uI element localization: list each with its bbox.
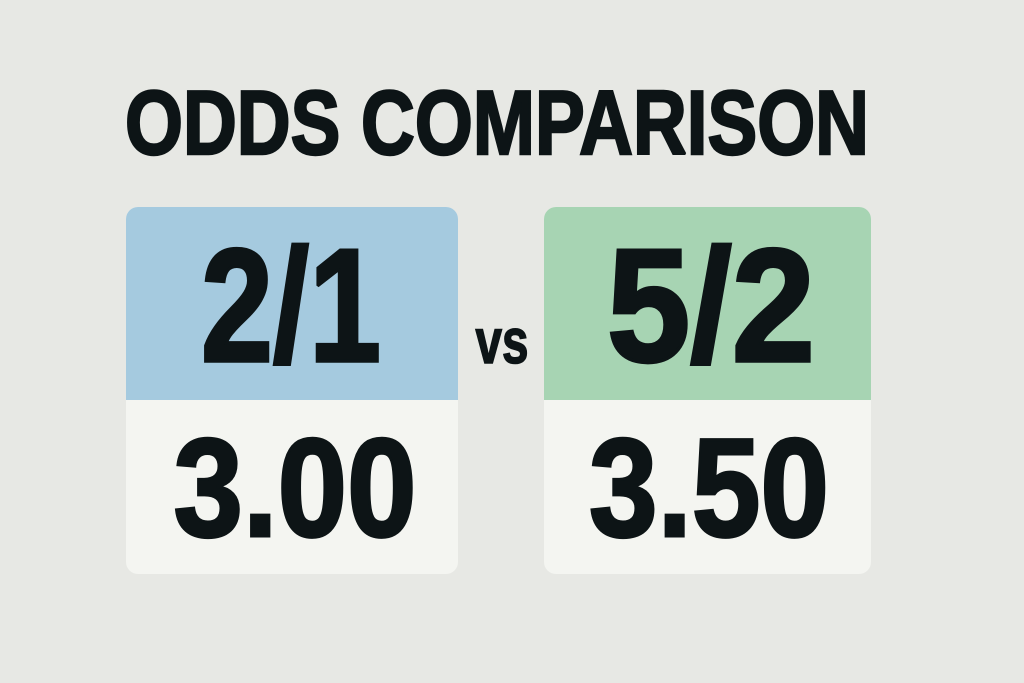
- panel: right odds card: [544, 207, 871, 574]
- decimal odds 3.00: 3.00: [174, 409, 416, 566]
- left card lower background: [126, 207, 458, 574]
- fractional odds 2/1: 2/1: [201, 216, 381, 396]
- panel: left odds card: [126, 207, 458, 574]
- decimal odds 3.50: 3.50: [589, 409, 829, 566]
- right card lower background: [544, 207, 871, 574]
- right card green header: [544, 207, 871, 400]
- left card blue header: [126, 207, 458, 400]
- vs label: vs: [476, 307, 528, 377]
- title: ODDS COMPARISON: [125, 73, 869, 174]
- fractional odds 5/2: 5/2: [607, 216, 815, 396]
